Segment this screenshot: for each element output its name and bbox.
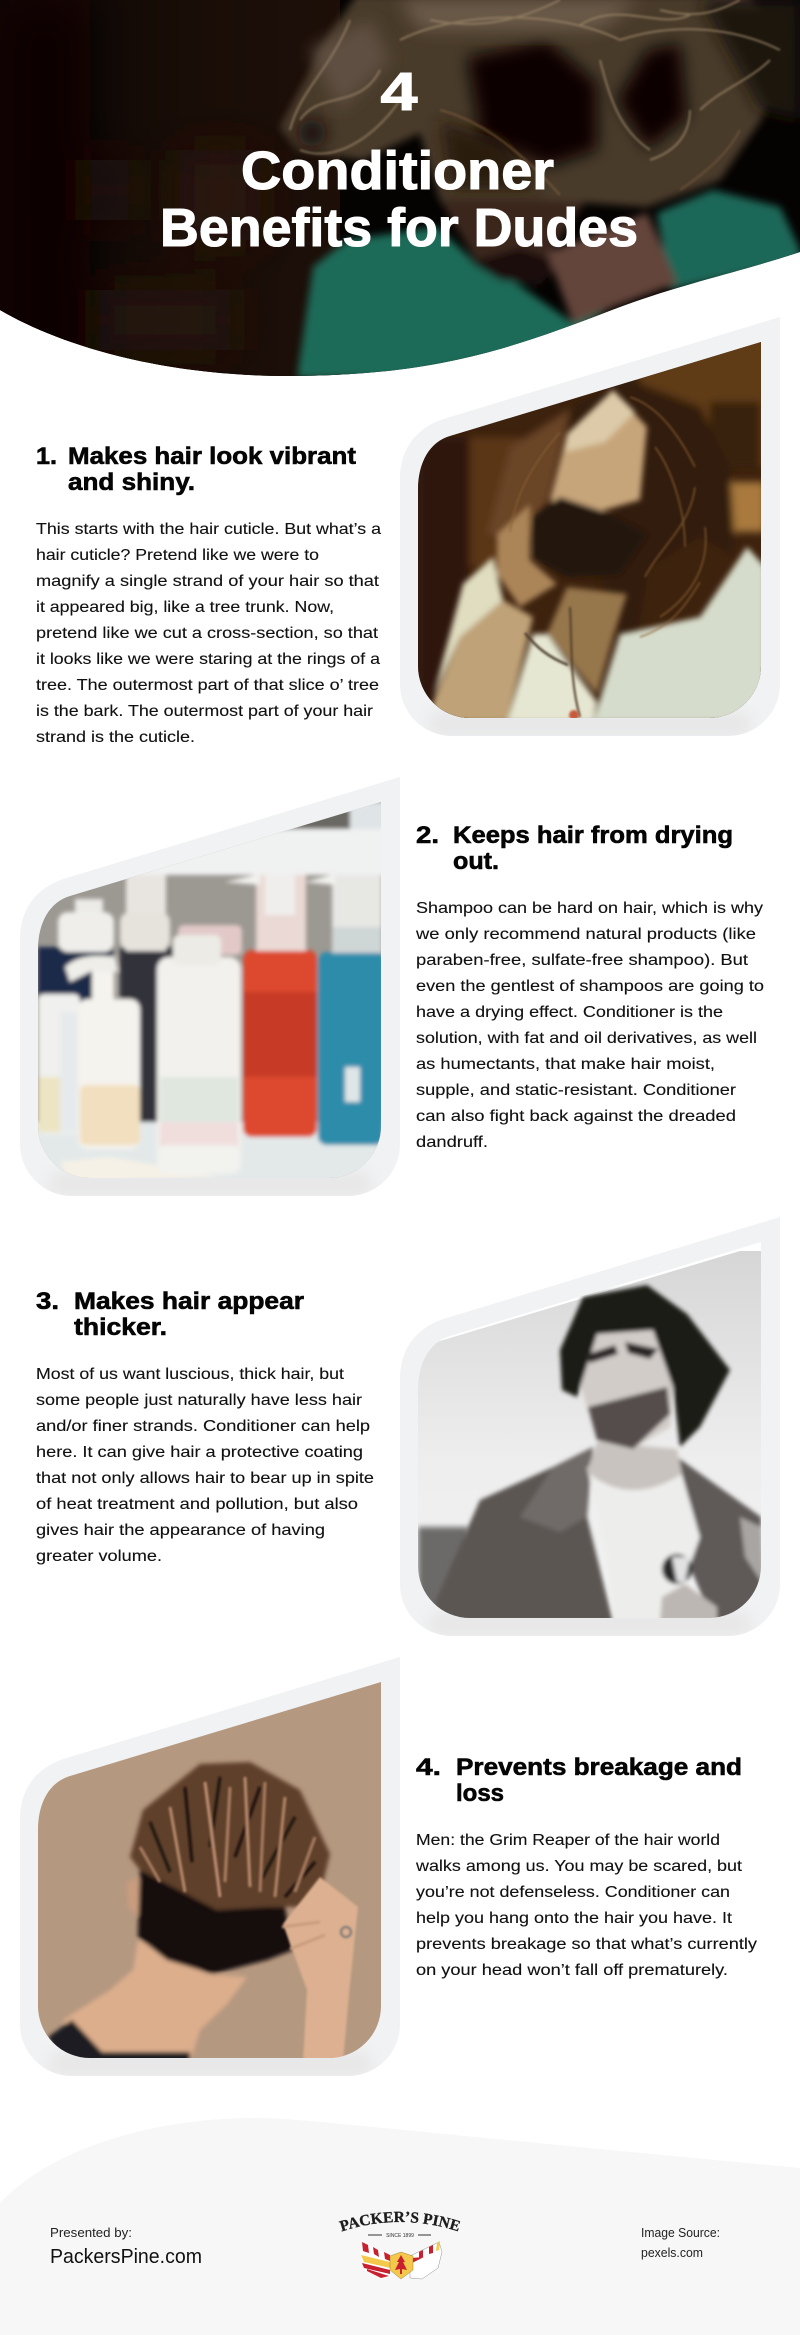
title [160, 62, 638, 258]
text block 1: is the bark. The outermost part of your hair [36, 703, 374, 720]
text block 4: prevents breakage so that what’s currently [416, 1936, 757, 1953]
text block 1: hair cuticle? Pretend like we were to [36, 547, 319, 564]
text block 2: dandruff. [416, 1134, 488, 1151]
text block 2: even the gentlest of shampoos are going to [416, 978, 764, 995]
text block 3: here. It can give hair a protective coating [36, 1444, 363, 1461]
text block 3: some people just naturally have less hair [36, 1392, 363, 1409]
text block 3: and/or finer strands. Conditioner can help [36, 1418, 370, 1435]
text block 1: tree. The outermost part of that slice o’ tree [36, 677, 379, 694]
text block 1: 1. [36, 443, 57, 470]
text block 2: as humectants, that make hair moist, [416, 1056, 715, 1073]
footer: image source [641, 2225, 720, 2260]
panel: photo frame 2, shampoo bottles [20, 777, 400, 1196]
text block 1: it appeared big, like a tree trunk. Now, [36, 599, 334, 616]
text block 1: strand is the cuticle. [36, 729, 195, 746]
text block 2: out. [453, 848, 499, 875]
text block 3: thicker. [74, 1314, 167, 1341]
logo: Packer's Pine crest: PACKER’S PINE [338, 2212, 460, 2232]
text block 4 [415, 1754, 757, 1979]
text block 2: Keeps hair from drying [453, 822, 733, 849]
panel: photo frame 4, back of short haircut [20, 1657, 400, 2076]
text block 1: magnify a single strand of your hair so that [36, 573, 380, 590]
text block 4: you’re not defenseless. Conditioner can [416, 1884, 730, 1901]
footer: presented by: PackersPine.com [50, 2246, 202, 2268]
text block 2: can also fight back against the dreaded [416, 1108, 736, 1125]
text block 3: of heat treatment and pollution, but also [36, 1496, 358, 1513]
text block 4: Prevents breakage and [456, 1754, 742, 1781]
text block 1: Makes hair look vibrant [68, 443, 356, 470]
title: Benefits for Dudes [160, 198, 638, 258]
text block 4: loss [456, 1780, 504, 1807]
footer: image source: pexels.com [641, 2245, 703, 2260]
text block 2: we only recommend natural products (like [415, 926, 756, 943]
text block 4: help you hang onto the hair you have. It [416, 1910, 733, 1927]
text block 2: have a drying effect. Conditioner is the [416, 1004, 723, 1021]
text block 2 [415, 822, 764, 1151]
text block 2: solution, with fat and oil derivatives, as well [416, 1030, 757, 1047]
text block 3: Makes hair appear [74, 1288, 304, 1315]
footer: presented by [50, 2225, 202, 2268]
text block 1: This starts with the hair cuticle. But what’s a [36, 521, 381, 538]
text block 2: 2. [416, 822, 439, 849]
footer: image source: Image Source: [641, 2225, 720, 2240]
logo: Packer's Pine crest: SINCE 1899 [386, 2233, 414, 2239]
footer: presented by: Presented by: [50, 2225, 132, 2240]
text block 4: walks among us. You may be scared, but [415, 1858, 743, 1875]
panel: photo frame 3, man in denim jacket [400, 1217, 780, 1636]
header photo with wave edge [0, 0, 800, 380]
title: Conditioner [241, 141, 554, 201]
logo: Packer's Pine crest [338, 2212, 460, 2280]
text block 1: it looks like we were staring at the rings of a [36, 651, 380, 668]
text block 2: supple, and static-resistant. Conditioner [416, 1082, 737, 1099]
text block 3: Most of us want luscious, thick hair, but [36, 1366, 345, 1383]
text block 1: and shiny. [68, 469, 195, 496]
text block 2: paraben-free, sulfate-free shampoo). But [416, 952, 749, 969]
text block 3: 3. [36, 1288, 59, 1315]
panel: photo frame 1, man with long hair [400, 317, 780, 736]
text block 4: Men: the Grim Reaper of the hair world [416, 1832, 720, 1849]
text block 3: greater volume. [36, 1548, 162, 1565]
title: 4 [380, 62, 418, 122]
text block 3 [36, 1288, 374, 1565]
text block 3: gives hair the appearance of having [36, 1522, 325, 1539]
text block 2: Shampoo can be hard on hair, which is why [416, 900, 763, 917]
text block 1 [36, 443, 381, 746]
text block 4: 4. [416, 1754, 441, 1781]
text block 4: on your head won’t fall off prematurely. [416, 1962, 728, 1979]
text block 3: that not only allows hair to bear up in spite [36, 1470, 374, 1487]
text block 1: pretend like we cut a cross-section, so that [36, 625, 379, 642]
footer background [0, 2118, 800, 2335]
